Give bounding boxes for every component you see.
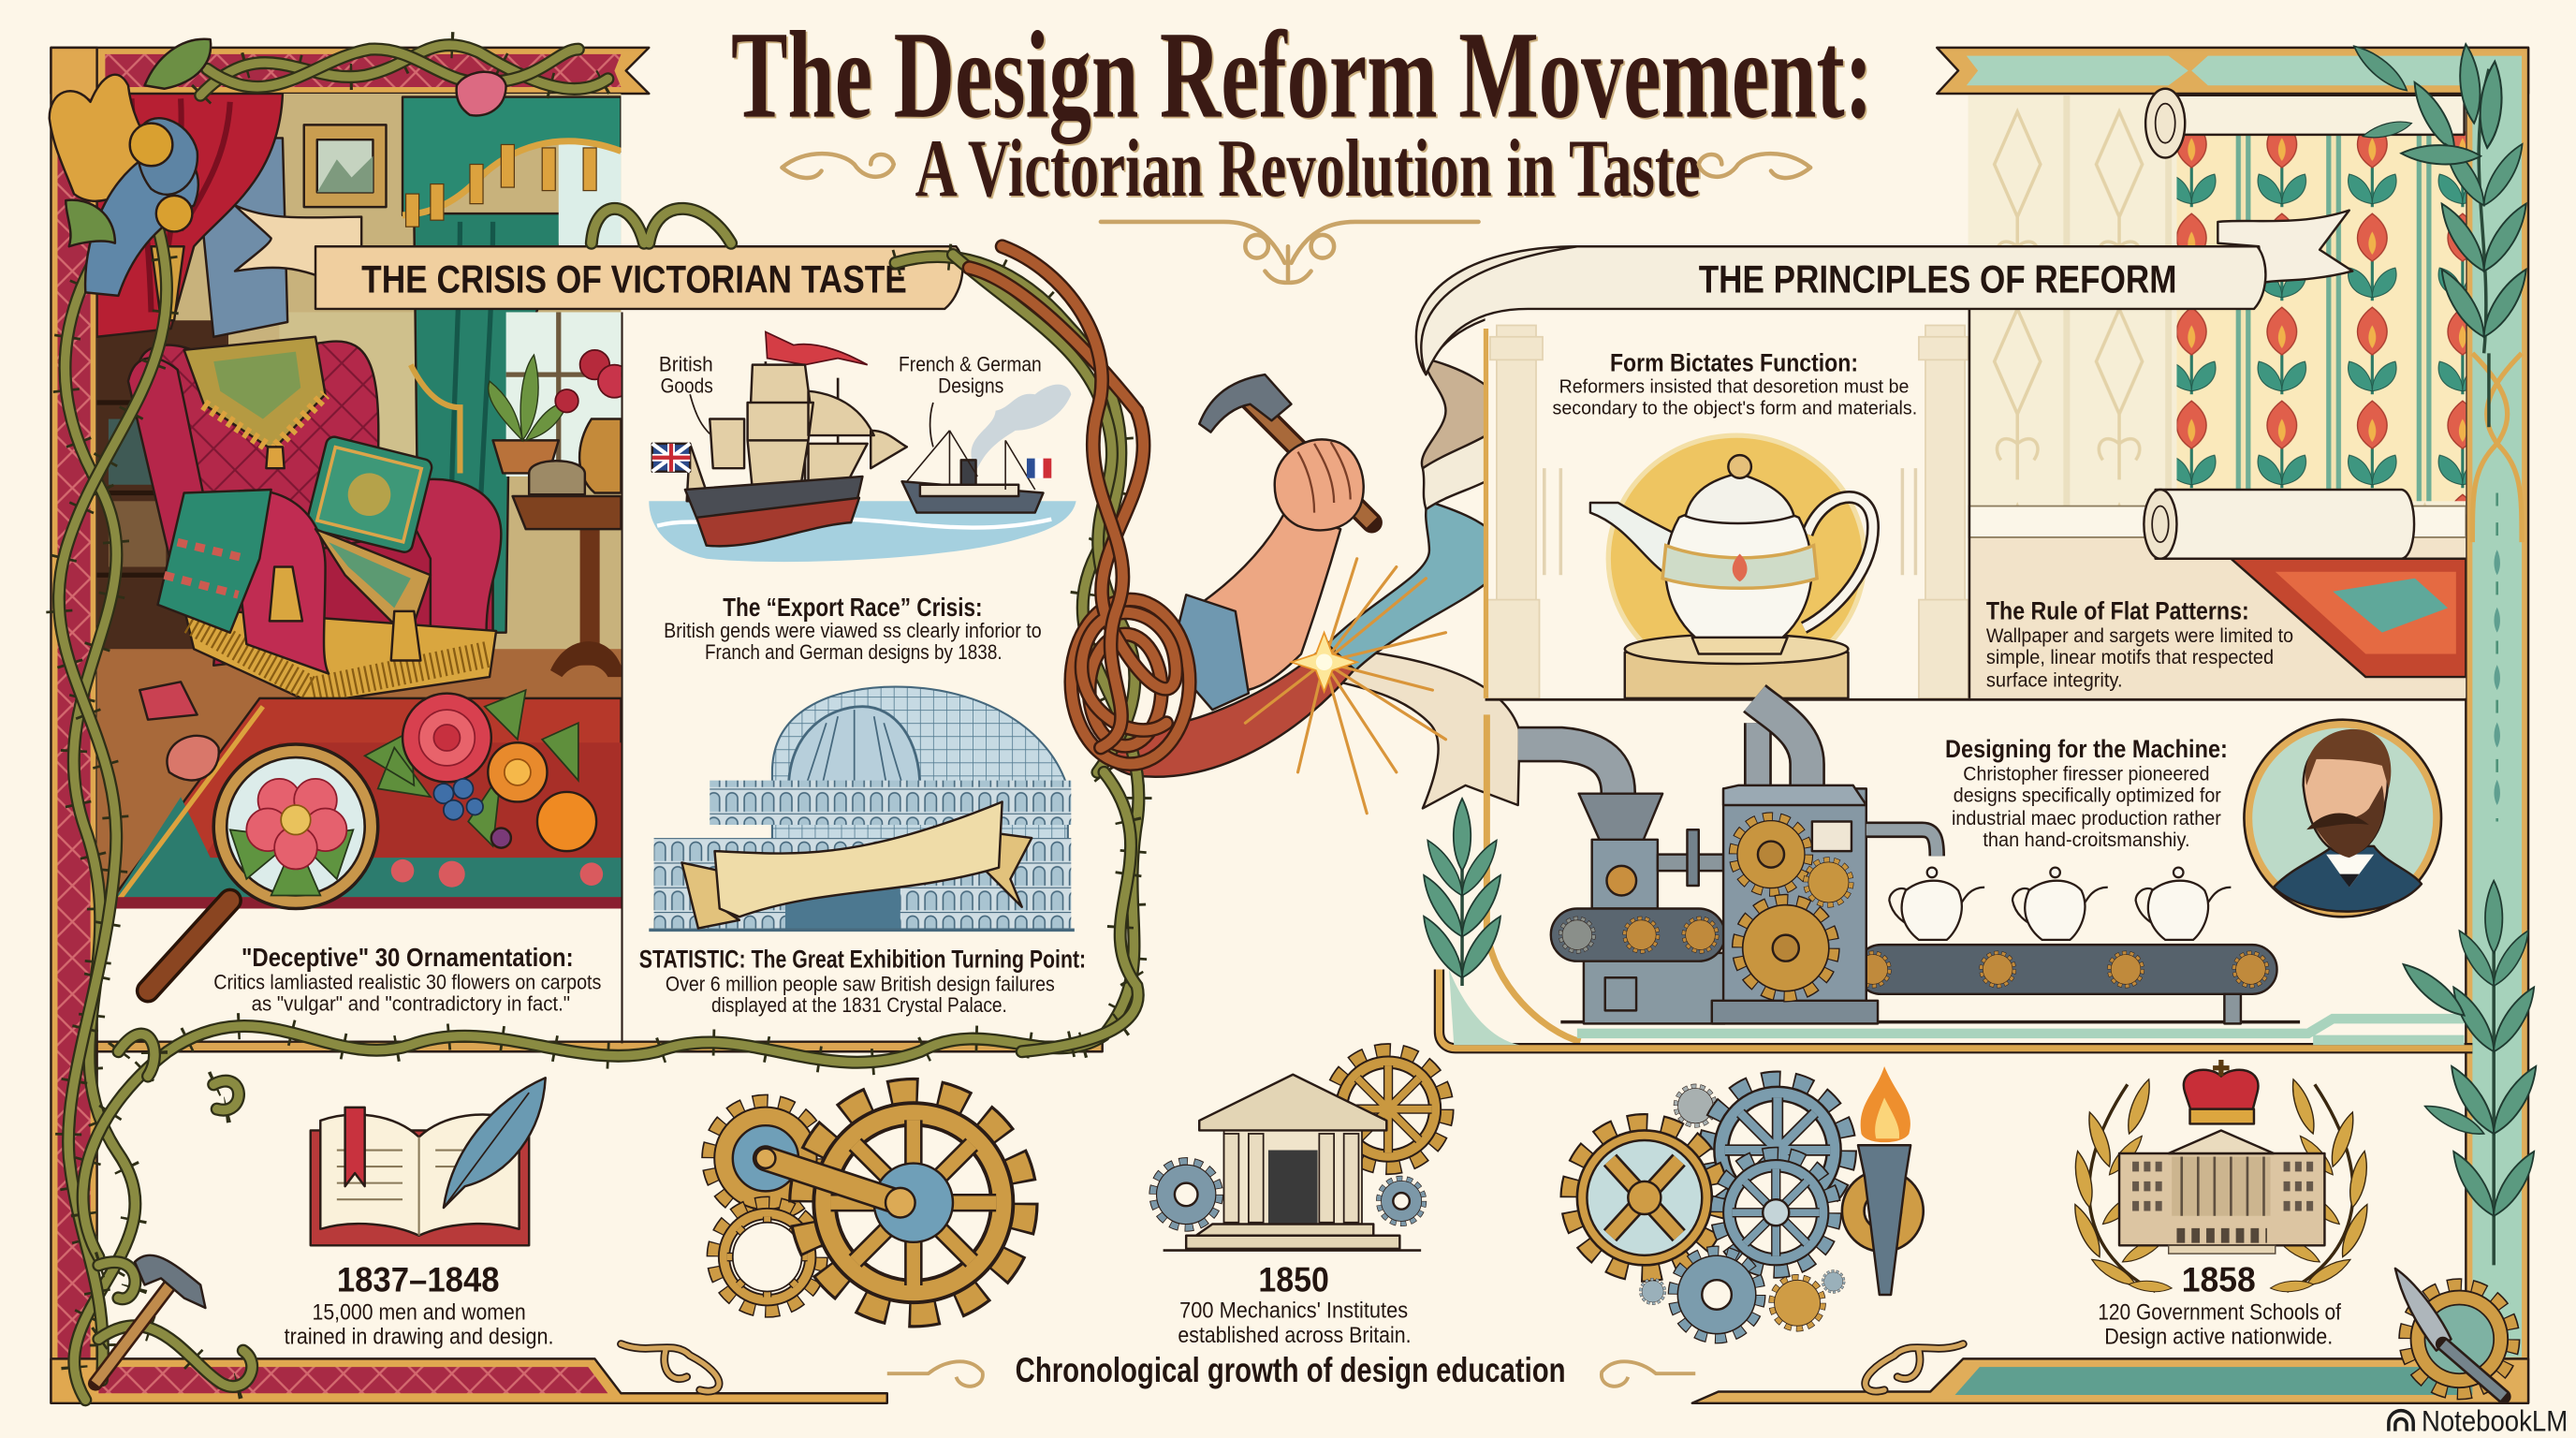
wallpaper floor roll xyxy=(2144,490,2414,559)
text: form dictates function: Form Bictates Function: xyxy=(1610,348,1858,377)
wreath xyxy=(2069,1077,2374,1293)
text: flat patterns: Wallpaper and sargets were limited to xyxy=(1986,624,2293,647)
armchair xyxy=(128,337,501,703)
text: statistic: STATISTIC: The Great Exhibition Turning Point: xyxy=(639,945,1086,974)
columns xyxy=(1486,325,1969,698)
text: 1850: 700 Mechanics' Institutes xyxy=(1179,1299,1408,1324)
right conveyor xyxy=(1856,945,2277,1023)
ships labels: Designs xyxy=(938,374,1003,397)
banner: crisis of victorian taste: THE CRISIS OF VICTORIAN TASTE xyxy=(361,257,907,301)
right band xyxy=(2466,48,2528,1403)
text: form dictates function: secondary to the object's form and materials. xyxy=(1553,397,1917,418)
shawl on chair back xyxy=(184,337,326,450)
text: flat patterns: The Rule of Flat Patterns: xyxy=(1986,596,2249,625)
text: designing for the machine xyxy=(1945,734,2228,851)
bookcase xyxy=(97,320,228,666)
right arm xyxy=(417,477,503,629)
text: deceptive ornamentation: as "vulgar" and "contradictory in fact." xyxy=(252,991,570,1015)
sailing ships: British vs French xyxy=(649,332,1076,562)
text: export race: The “Export Race” Crisis: xyxy=(723,593,983,622)
text: statistic xyxy=(639,945,1086,1017)
wallpaper top roll xyxy=(2145,89,2465,157)
text: 1837-1848: 1837–1848 xyxy=(337,1260,500,1299)
wall xyxy=(97,94,621,909)
blue underdrape xyxy=(194,138,287,337)
knife and gear bottom right xyxy=(2395,1269,2512,1397)
text: designing for the machine: industrial maec production rather xyxy=(1952,806,2221,829)
text: form dictates function: Reformers insisted that desoretion must be xyxy=(1559,375,1909,397)
text: flat patterns xyxy=(1986,596,2293,692)
carpet xyxy=(98,698,621,909)
tan twist xyxy=(1422,359,1505,468)
text: 1858: 120 Government Schools of xyxy=(2098,1300,2341,1325)
text: deceptive ornamentation xyxy=(213,943,601,1015)
fist xyxy=(1275,439,1364,530)
text: 1850 xyxy=(1178,1260,1412,1348)
text: 1858: 1858 xyxy=(2182,1260,2256,1299)
crystal palace xyxy=(649,687,1075,930)
text: designing for the machine: designs specifically optimized for xyxy=(1954,783,2221,806)
banner: crisis of victorian taste xyxy=(235,205,962,309)
banner: principles of reform xyxy=(1421,211,2352,374)
bottom band xyxy=(51,1358,887,1403)
text: statistic: Over 6 million people saw British design failures xyxy=(666,972,1055,995)
corner acanthus, pods and rose xyxy=(50,39,506,296)
ships labels: British xyxy=(659,353,713,376)
cushion xyxy=(305,435,433,554)
small unit xyxy=(1592,829,1723,909)
torch xyxy=(1853,1066,1912,1295)
rust knot xyxy=(970,246,1190,764)
magnifying glass xyxy=(148,744,378,990)
text: deceptive ornamentation: Critics lamliasted realistic 30 flowers on carpots xyxy=(213,971,601,994)
draped fabric xyxy=(315,529,431,633)
title xyxy=(731,6,1873,213)
mid right laurel xyxy=(2397,881,2544,1265)
gold divider xyxy=(97,1042,1103,1051)
text: export race: British gends were viawed ss clearly inforior to xyxy=(664,619,1042,642)
crown xyxy=(2184,1060,2258,1123)
text: 1850: 1850 xyxy=(1258,1260,1329,1299)
french flag xyxy=(1027,459,1051,478)
green curtain and valance xyxy=(402,97,621,633)
title: The Design Reform Movement: xyxy=(731,6,1873,145)
text: 1858 xyxy=(2098,1260,2341,1350)
sleeve xyxy=(1170,594,1249,710)
banner: principles of reform: THE PRINCIPLES OF REFORM xyxy=(1699,257,2176,301)
text: 1837-1848: 15,000 men and women xyxy=(313,1300,526,1325)
window with plant xyxy=(489,312,631,493)
left belt xyxy=(1551,909,1725,961)
pipes xyxy=(1518,698,1808,794)
text: export race: Franch and German designs by 1838. xyxy=(705,640,1003,664)
top band xyxy=(51,48,649,94)
lower cream strip xyxy=(1339,649,1519,808)
reform ribbon xyxy=(1100,246,2261,808)
red ribbon xyxy=(1100,644,1354,777)
floor xyxy=(1969,536,2466,698)
text: designing for the machine: Christopher firesser pioneered xyxy=(1963,762,2210,785)
cream lower twist xyxy=(1423,419,1505,509)
timeline icon: institute temple xyxy=(1153,1051,1446,1251)
left arm with green throw xyxy=(230,491,329,674)
seat xyxy=(213,518,493,666)
left band xyxy=(51,48,97,1403)
caption: chronological growth: Chronological growth of design education xyxy=(1016,1351,1566,1389)
text: 1837-1848 xyxy=(285,1260,554,1350)
ships labels xyxy=(659,353,1042,397)
text: deceptive ornamentation: "Deceptive" 30 Ornamentation: xyxy=(242,943,574,972)
bottom band xyxy=(1692,1358,2528,1403)
machine panel frame xyxy=(1439,714,2472,1049)
band twist ornament xyxy=(2472,353,2522,822)
laurel sprigs xyxy=(1416,40,2544,1265)
text: designing for the machine: Designing for the Machine: xyxy=(1945,734,2228,763)
text: flat patterns: surface integrity. xyxy=(1986,668,2123,692)
water xyxy=(649,501,1076,562)
faucet xyxy=(1866,829,1937,856)
timeline icon: gears xyxy=(710,1093,1023,1313)
carpet flowers xyxy=(139,682,596,851)
cabinet xyxy=(1712,785,1878,1023)
cream top arc xyxy=(1416,246,2261,374)
text: 1837-1848: trained in drawing and design. xyxy=(285,1326,554,1350)
text: flat patterns: simple, linear motifs that respected xyxy=(1986,645,2274,668)
machine xyxy=(1518,698,2277,1023)
spark of impact xyxy=(1245,559,1445,814)
wallpaper panel xyxy=(1969,95,2466,698)
hammer xyxy=(1199,374,1372,522)
teal ribbon xyxy=(1327,501,1505,670)
top right laurel xyxy=(2349,40,2534,427)
panel: crisis frame left xyxy=(51,48,1103,1403)
text: 1850: established across Britain. xyxy=(1178,1324,1412,1348)
text: designing for the machine: than hand-croitsmanshiy. xyxy=(1983,828,2190,851)
band end scrolls xyxy=(621,1344,1963,1391)
carpet xyxy=(2231,559,2466,677)
timeline icon: book and quill xyxy=(311,1078,546,1245)
teapot panel xyxy=(1486,309,1969,698)
left sprig xyxy=(1416,799,1508,986)
union flag xyxy=(652,444,690,472)
portrait of Christopher Dresser xyxy=(2244,720,2441,917)
teapots on belt xyxy=(1889,868,2231,940)
text: form dictates function xyxy=(1553,348,1917,418)
lower body xyxy=(1584,953,1725,1023)
picture frame xyxy=(304,125,386,207)
fringe xyxy=(184,608,496,703)
timeline icon: gears and torch xyxy=(1571,1066,1912,1338)
panel: principles frame right xyxy=(1692,48,2528,1403)
pedestal xyxy=(1625,634,1848,698)
sailing ship xyxy=(652,332,907,546)
title flourishes xyxy=(782,154,1810,283)
caption flourishes xyxy=(887,1361,1695,1387)
forearm xyxy=(1190,513,1340,692)
top band xyxy=(1937,48,2528,94)
ships labels: Goods xyxy=(661,374,713,397)
building xyxy=(2119,1130,2324,1254)
sun disc xyxy=(1608,435,1865,682)
side table xyxy=(513,461,621,677)
dividers xyxy=(1486,309,2466,701)
teapot xyxy=(1590,455,1873,654)
ships labels: French & German xyxy=(899,353,1042,376)
hammer bottom left xyxy=(95,1255,205,1384)
vines xyxy=(50,39,1190,1400)
palace banner xyxy=(681,801,1032,929)
text: statistic: displayed at the 1831 Crystal Palace. xyxy=(711,993,1007,1017)
text: export race xyxy=(664,593,1042,664)
illustration: cluttered Victorian parlour xyxy=(97,94,631,909)
red curtain xyxy=(97,94,283,337)
hopper xyxy=(1579,794,1662,842)
text: 1858: Design active nationwide. xyxy=(2104,1326,2333,1350)
curtain tie xyxy=(411,365,460,473)
steam ship xyxy=(902,385,1071,513)
timeline icon: crown, school and wreath xyxy=(2069,1060,2374,1293)
hammer-wielding arm xyxy=(1170,374,1372,710)
subtitle: A Victorian Revolution in Taste xyxy=(915,123,1701,213)
floor xyxy=(97,649,621,909)
